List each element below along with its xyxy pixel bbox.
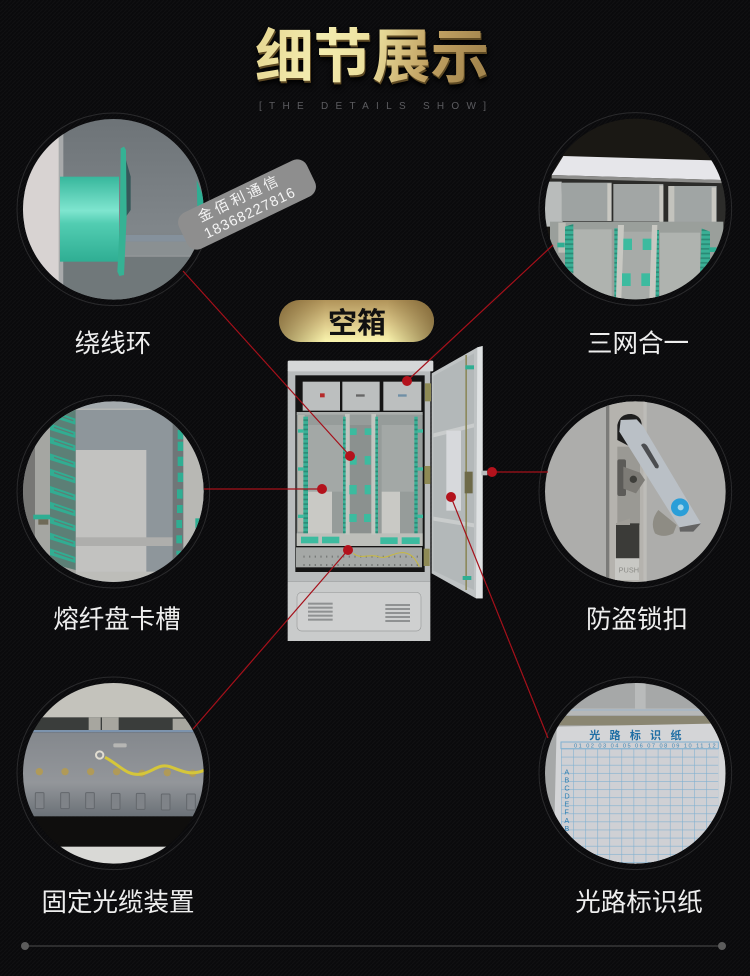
cabinet (288, 346, 487, 641)
panel: optical path label paper photo: D (564, 792, 570, 801)
green racks (298, 417, 423, 544)
panel: optical path label paper photo: C (564, 783, 570, 792)
panel: optical path label paper photo (539, 677, 732, 870)
badge: empty cabinet: 空箱 (328, 307, 386, 340)
open door (432, 346, 487, 598)
panel: optical path label paper photo: B (564, 824, 569, 833)
badge: empty cabinet (279, 300, 434, 342)
panel: optical path label paper photo: B (564, 775, 569, 784)
label: fiber tray slots: 熔纤盘卡槽 (53, 606, 181, 634)
title: 细节展示 (255, 25, 489, 90)
watermark badge: 金佰利通信 (195, 171, 284, 226)
panel: optical path label paper photo: E (564, 800, 569, 809)
connector lines (183, 245, 553, 738)
panel: optical path label paper photo: A (564, 816, 569, 825)
label: three networks: 三网合一 (587, 330, 689, 358)
label: fixed cable device: 固定光缆装置 (41, 889, 195, 917)
panel: fixed cable device photo (17, 677, 210, 870)
panel: optical path label paper photo: 光路标识纸 (589, 728, 691, 742)
panel: optical path label paper photo: A (564, 767, 569, 776)
cabinet body (288, 361, 433, 582)
panel: fiber tray slots photo (17, 395, 210, 588)
label: anti-theft lock: 防盗锁扣 (586, 606, 688, 634)
panel: anti-theft lock photo: PUSH (619, 566, 639, 575)
panel: optical path label paper photo: 01 02 03 04 05 06 07 08 09 10 11 12 (574, 744, 716, 750)
grounding bar (296, 547, 422, 567)
panel: winding ring photo (17, 113, 210, 306)
top boxes (303, 382, 421, 411)
label: optical path label paper: 光路标识纸 (575, 889, 703, 917)
connector dots (317, 376, 497, 555)
panel: anti-theft lock photo (539, 395, 732, 588)
label: winding ring: 绕线环 (75, 330, 151, 358)
watermark badge (174, 156, 320, 253)
panel: three networks photo (539, 113, 732, 305)
hinges (424, 383, 431, 566)
cabinet base (288, 582, 430, 641)
footer divider (21, 942, 726, 950)
panel: optical path label paper photo: F (564, 808, 569, 817)
watermark badge: 18368227816 (202, 185, 299, 242)
subtitle: [THE DETAILS SHOW] (259, 101, 486, 112)
